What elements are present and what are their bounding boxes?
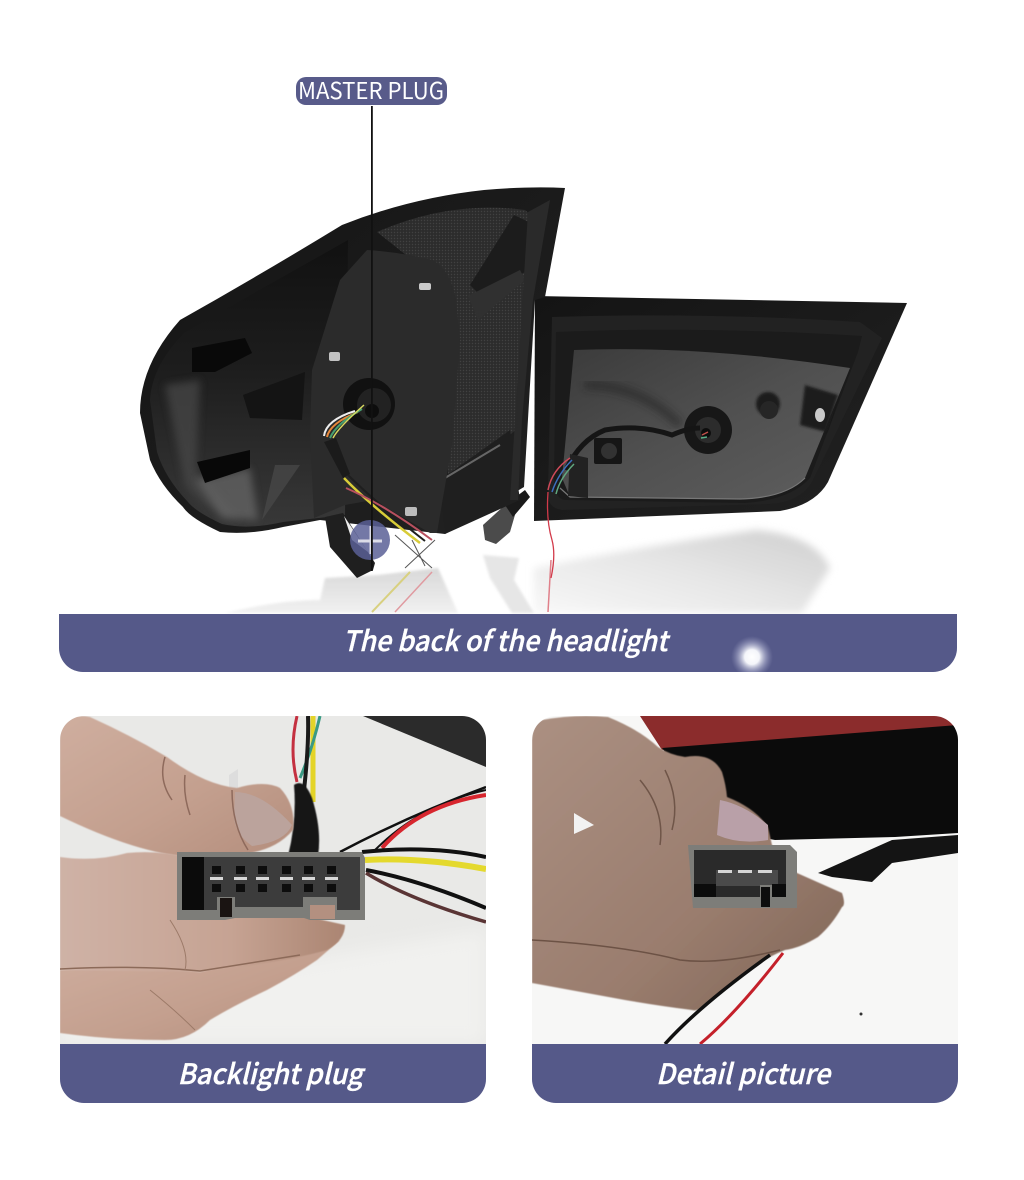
leader line	[371, 106, 373, 571]
hotspot marker	[350, 520, 390, 560]
right lamp posts	[594, 385, 838, 464]
caption text: The back of the headlight	[342, 620, 671, 660]
caption text: Backlight plug	[178, 1053, 366, 1093]
connector	[688, 845, 797, 908]
photo: hand holding backlight plug	[60, 716, 486, 1044]
panel: backlight plug	[60, 716, 486, 1103]
left lamp plug	[325, 513, 375, 578]
right lamp harness	[548, 428, 700, 578]
caption bar	[532, 1044, 958, 1103]
connector	[177, 852, 365, 920]
panel: detail picture	[532, 716, 958, 1103]
left lamp centre plate	[310, 250, 460, 533]
photo: left lamp back	[140, 187, 565, 578]
master plug label: MASTER PLUG	[298, 72, 444, 106]
photo: headlight reflection	[225, 530, 830, 613]
main caption banner	[59, 614, 957, 672]
light glare	[732, 638, 772, 672]
right lamp grommet	[684, 406, 732, 454]
right lamp small plug	[483, 490, 530, 544]
caption text: Detail picture	[656, 1053, 832, 1093]
caption bar	[60, 1044, 486, 1103]
photo: hand holding detail plug	[532, 716, 958, 1044]
left lamp wiring harness	[324, 405, 435, 568]
left lamp mesh panel	[377, 200, 550, 534]
photo: right lamp back	[483, 296, 907, 578]
